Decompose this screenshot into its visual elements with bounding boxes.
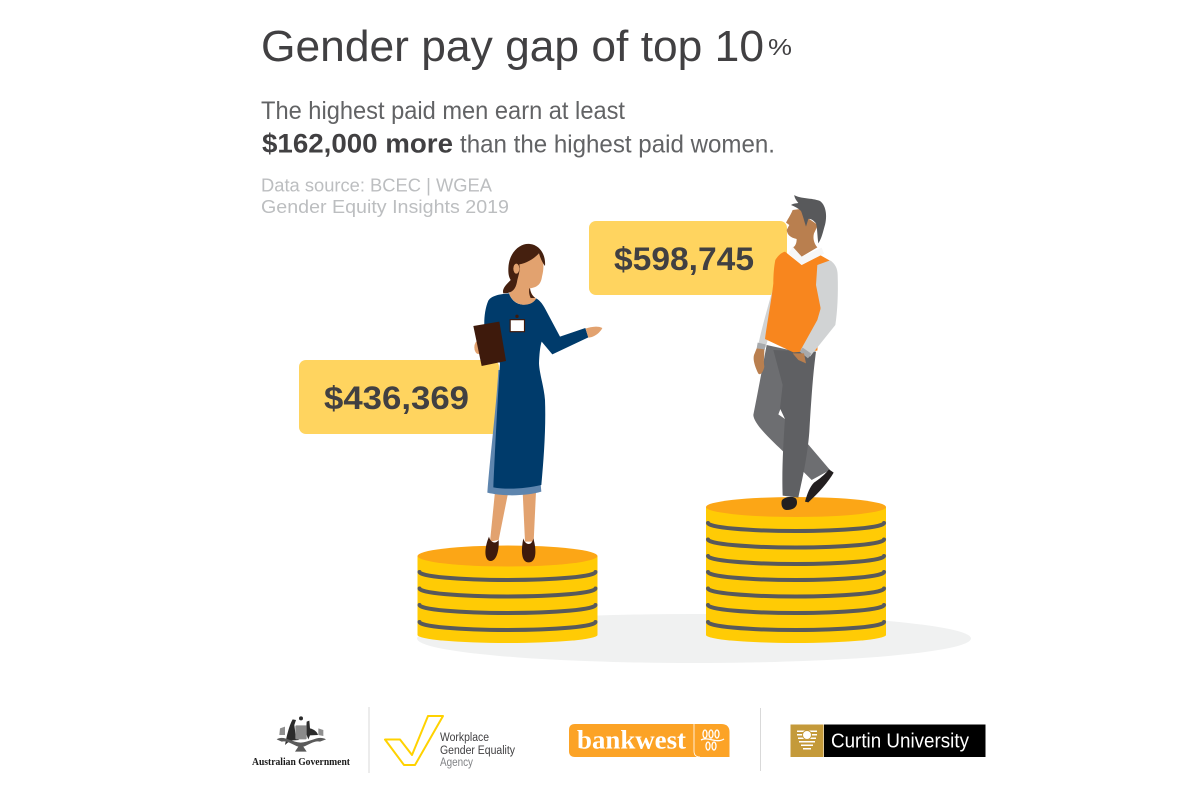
title: Gender pay gap of top 10 [261,22,764,71]
callout: men's pay [589,221,787,295]
logo: Australian Government [252,716,350,768]
callout: women's pay [299,360,499,434]
crest [277,716,326,752]
subtitle text [261,97,775,158]
title: % [768,34,792,60]
subtitle text: $162,000 more [262,128,453,158]
logo: Curtin University [790,724,986,757]
divider 1 [368,707,370,773]
figure: woman [473,244,602,562]
callout: men's pay: $598,745 [614,241,754,277]
data source text: Gender Equity Insights 2019 [261,197,509,217]
subtitle text: The highest paid men earn at least [261,97,625,125]
logo: Australian Government: Australian Government [252,757,350,768]
coin stack: men [706,497,886,643]
data source text [261,176,509,217]
data source text: Data source: BCEC | WGEA [261,176,492,196]
logo: Bankwest: bankwest [577,726,686,754]
subtitle text: than the highest paid women. [460,130,775,158]
logo: Workplace Gender Equality Agency: Workplace [440,732,489,744]
coin stack: women [418,546,598,643]
logo: Curtin University: Curtin University [831,730,970,752]
ground shadow [417,614,971,663]
divider 2 [760,708,761,771]
callout: women's pay: $436,369 [324,380,469,416]
logo: Bankwest [569,724,730,757]
logo: Workplace Gender Equality Agency: Gender Equality [440,745,515,757]
logo: Workplace Gender Equality Agency [385,716,515,769]
logo: Workplace Gender Equality Agency: Agency [440,757,473,769]
figure: man [753,195,838,510]
